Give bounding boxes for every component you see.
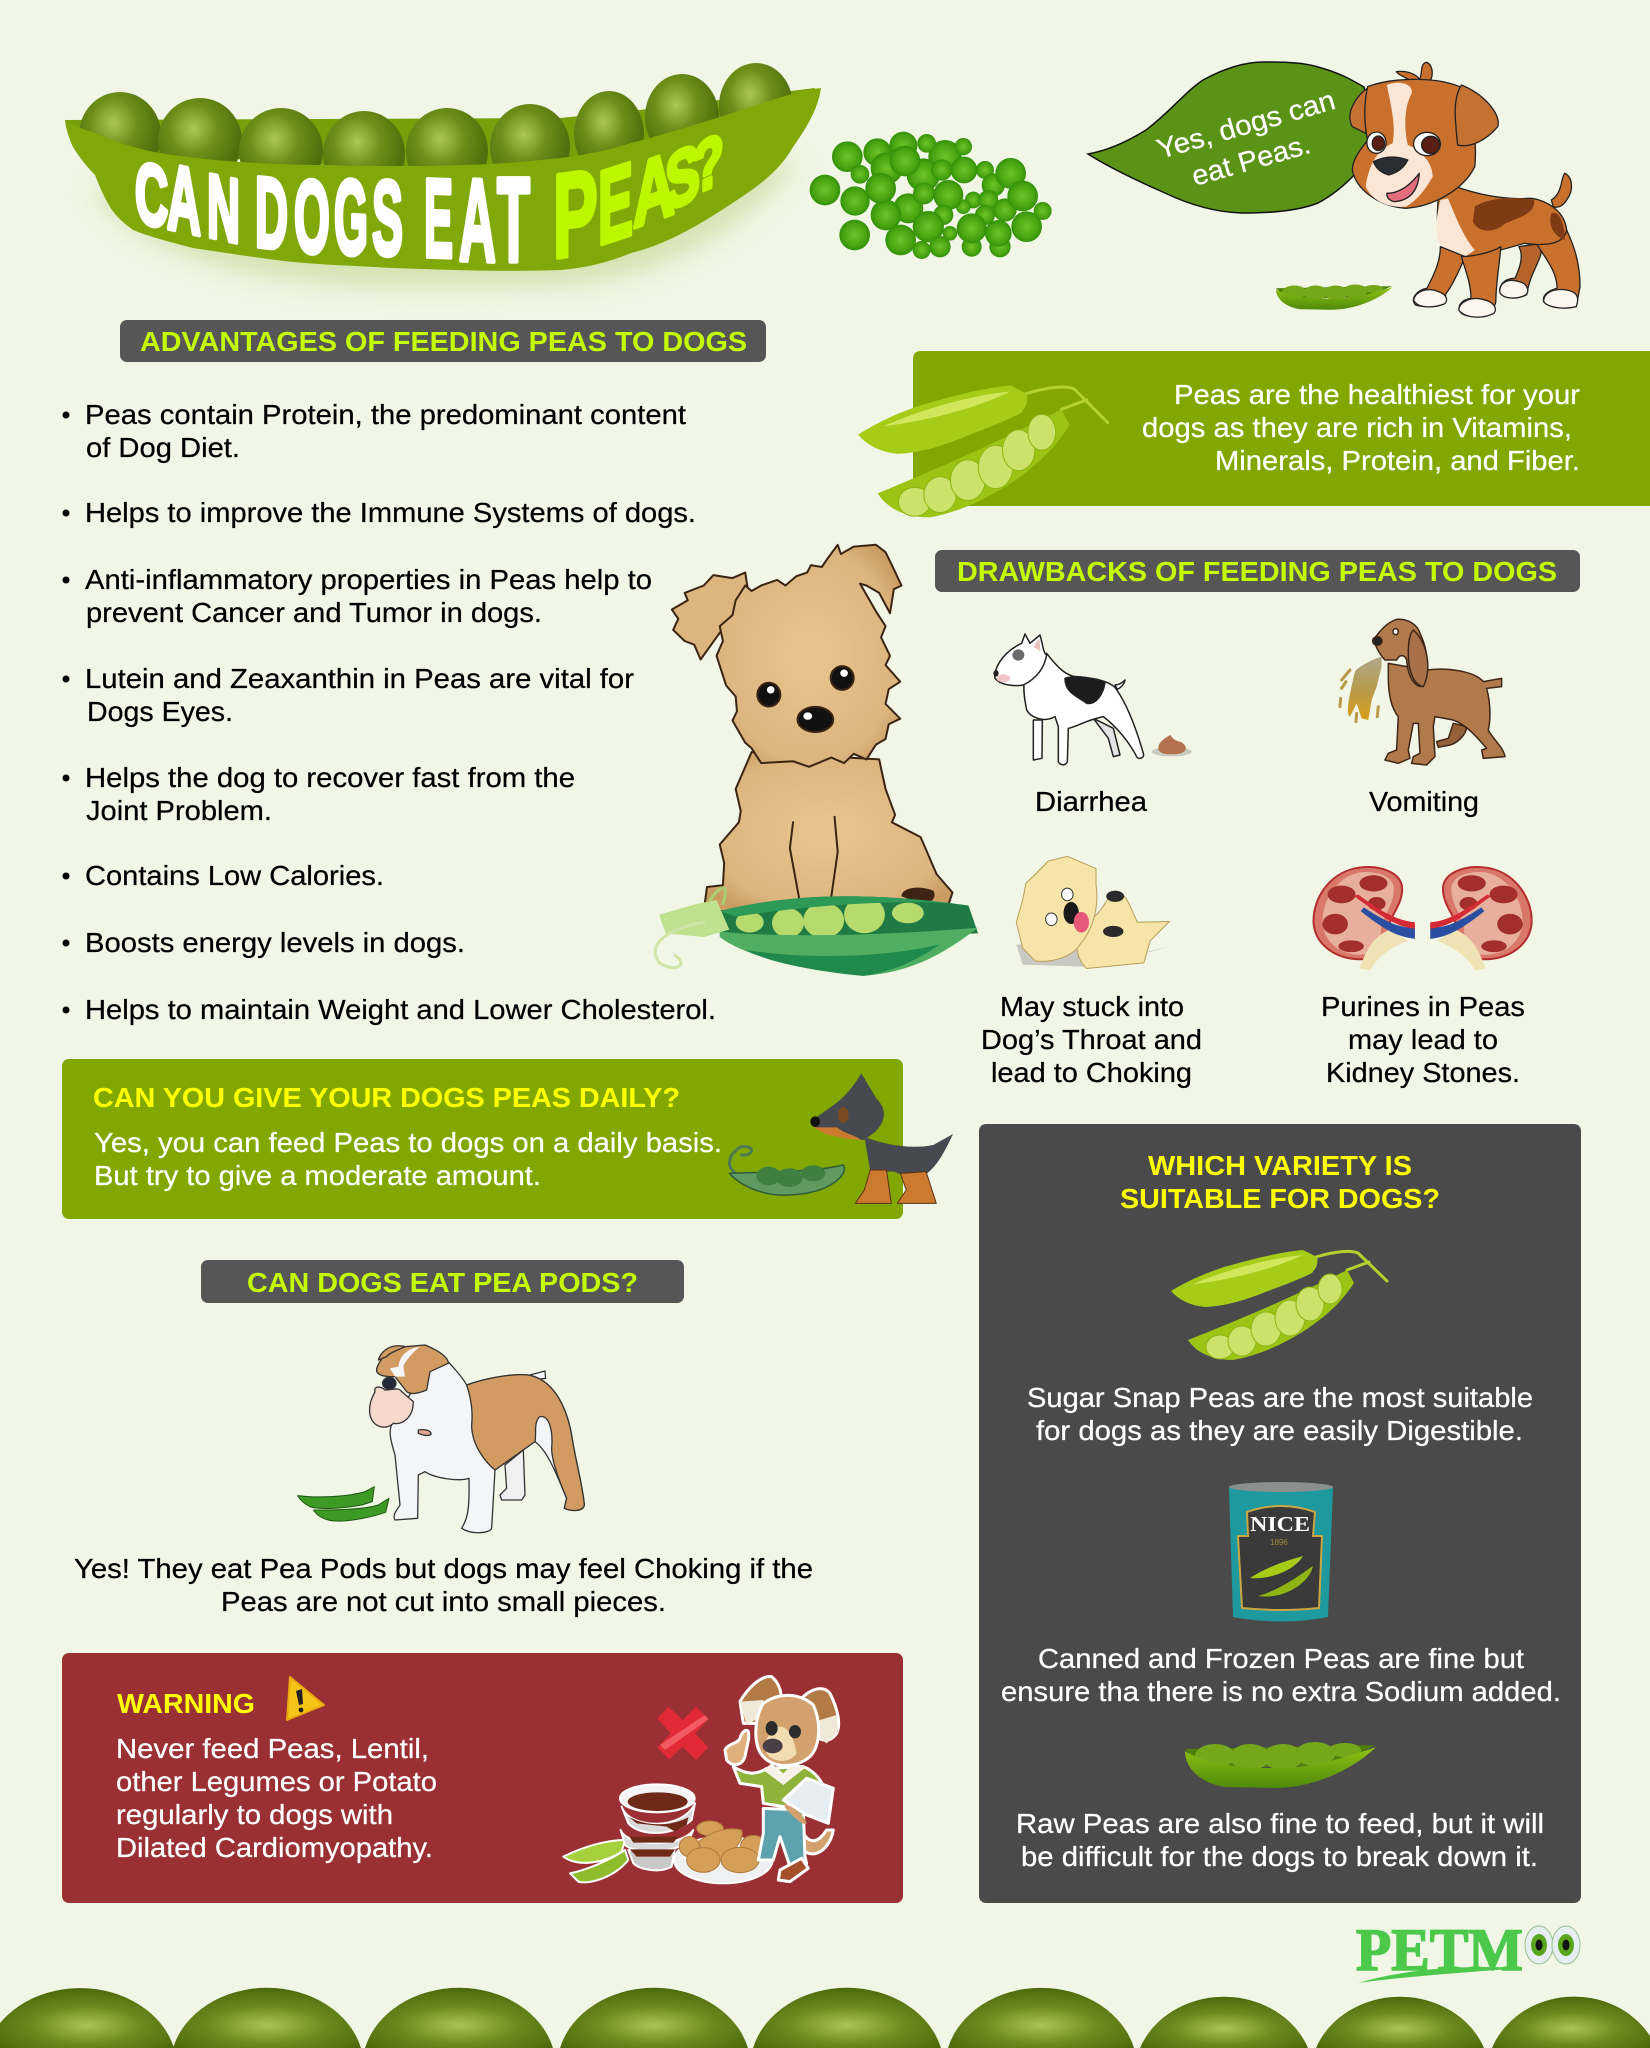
icon: can of peas: NICE xyxy=(1250,1512,1310,1536)
legs xyxy=(758,1808,807,1867)
poop pile xyxy=(1152,735,1192,756)
variety heading xyxy=(1120,1150,1440,1214)
fluffy sitting puppy on pod xyxy=(655,545,978,976)
panel: daily peas xyxy=(62,1059,903,1219)
title text: O xyxy=(294,158,330,275)
pea pods text xyxy=(74,1553,813,1617)
speech text: Yes, dogs can xyxy=(1153,84,1339,165)
advantages list: Helps to maintain Weight and Lower Cholesterol. xyxy=(85,994,716,1025)
panel: daily peas: But try to give a moderate amount. xyxy=(94,1160,541,1191)
arm and finger xyxy=(725,1730,749,1765)
advantages list: Helps the dog to recover fast from the xyxy=(85,762,575,793)
icon: kidneys xyxy=(1314,867,1532,970)
advantages list: Helps to improve the Immune Systems of dogs. xyxy=(85,497,696,528)
label: choking: Dog’s Throat and xyxy=(981,1024,1202,1055)
pea pod under puppy xyxy=(659,896,978,976)
pea pods text: Peas are not cut into small pieces. xyxy=(221,1586,666,1617)
advantages list: Boosts energy levels in dogs. xyxy=(85,927,465,958)
title text: D xyxy=(255,157,288,271)
petmoo logo: PETM xyxy=(1356,1917,1523,1983)
panel: warning: WARNING xyxy=(117,1688,255,1719)
panel: warning: Dilated Cardiomyopathy. xyxy=(116,1832,433,1863)
icon: can of peas: 1896 xyxy=(1270,1538,1288,1547)
label: diarrhea: Diarrhea xyxy=(1035,786,1147,817)
raw peas text: Raw Peas are also fine to feed, but it will xyxy=(1016,1808,1544,1839)
icon: snap peas on banner xyxy=(858,385,1108,517)
title text: P xyxy=(553,144,598,284)
green banner: Minerals, Protein, and Fiber. xyxy=(1215,445,1580,476)
icon: vomiting dog xyxy=(1340,619,1505,765)
green banner xyxy=(913,351,1650,506)
title text: E xyxy=(598,140,633,267)
speech text xyxy=(1153,84,1339,192)
title text: ? xyxy=(693,117,724,211)
green banner: Peas are the healthiest for your xyxy=(1174,379,1580,410)
icon: choking puppy xyxy=(1016,856,1169,968)
title text xyxy=(135,117,724,287)
label: choking xyxy=(981,991,1202,1088)
label: choking: May stuck into xyxy=(1000,991,1184,1022)
ears xyxy=(740,1677,782,1723)
small pea pod by puppy xyxy=(1276,284,1393,310)
sugar snap text: for dogs as they are easily Digestible. xyxy=(1036,1415,1523,1446)
title text: A xyxy=(459,155,496,287)
title pea pod banner xyxy=(65,63,821,288)
pile of green peas xyxy=(810,132,1052,259)
advantages list: prevent Cancer and Tumor in dogs. xyxy=(86,597,542,628)
advantages heading xyxy=(120,320,766,362)
icon: can of peas xyxy=(1229,1482,1333,1622)
icon: raw pea pod xyxy=(1185,1742,1376,1788)
canned peas text: ensure tha there is no extra Sodium added. xyxy=(1001,1676,1561,1707)
panel: warning: Never feed Peas, Lentil, xyxy=(116,1733,429,1764)
panel: warning xyxy=(62,1653,903,1903)
title text: G xyxy=(334,159,368,278)
title text: A xyxy=(167,144,201,255)
icon: sugar snap peas xyxy=(1171,1250,1387,1360)
illustration: dog with bowls and potatoes xyxy=(563,1677,839,1883)
icon: black and tan dog with pod xyxy=(729,1073,953,1203)
canned peas text: Canned and Frozen Peas are fine but xyxy=(1038,1643,1524,1674)
pods by bulldog xyxy=(298,1487,389,1521)
pea pods heading: CAN DOGS EAT PEA PODS? xyxy=(247,1267,638,1298)
snap peas xyxy=(563,1840,628,1882)
peas in the title pod xyxy=(79,63,793,197)
green banner: dogs as they are rich in Vitamins, xyxy=(1142,412,1572,443)
title text: T xyxy=(497,153,530,287)
icon: warning triangle xyxy=(287,1677,324,1720)
label: kidney stones: Purines in Peas xyxy=(1321,991,1525,1022)
label: kidney stones: may lead to xyxy=(1348,1024,1498,1055)
brown puppy xyxy=(1350,62,1580,317)
sugar snap text xyxy=(1027,1382,1533,1446)
title text: S xyxy=(372,159,403,278)
panel: daily peas: Yes, you can feed Peas to dogs on a daily basis. xyxy=(94,1127,722,1158)
panel: which variety xyxy=(979,1124,1581,1903)
drawbacks heading xyxy=(935,550,1580,592)
title text: S xyxy=(665,127,700,228)
head xyxy=(756,1695,819,1765)
panel: daily peas: CAN YOU GIVE YOUR DOGS PEAS DAILY? xyxy=(93,1082,680,1113)
panel: warning: other Legumes or Potato xyxy=(116,1766,437,1797)
raw peas text xyxy=(1016,1808,1544,1872)
pea pods text: Yes! They eat Pea Pods but dogs may feel Choking if the xyxy=(74,1553,813,1584)
advantages list: Peas contain Protein, the predominant content xyxy=(85,399,686,430)
advantages list: of Dog Diet. xyxy=(86,432,240,463)
label: kidney stones: Kidney Stones. xyxy=(1326,1057,1520,1088)
plate of potatoes xyxy=(674,1837,773,1883)
advantages list: Anti-inflammatory properties in Peas help to xyxy=(85,564,652,595)
bowls xyxy=(620,1784,695,1870)
raw peas text: be difficult for the dogs to break down it. xyxy=(1021,1841,1538,1872)
sugar snap text: Sugar Snap Peas are the most suitable xyxy=(1027,1382,1533,1413)
advantages list: Contains Low Calories. xyxy=(85,860,384,891)
title text: N xyxy=(207,156,240,263)
advantages list: Lutein and Zeaxanthin in Peas are vital for xyxy=(85,663,634,694)
advantages list: Dogs Eyes. xyxy=(87,696,233,727)
label: choking: lead to Choking xyxy=(991,1057,1192,1088)
title text: A xyxy=(633,132,675,248)
sweater xyxy=(733,1767,825,1807)
tail xyxy=(792,1817,833,1854)
canned peas text xyxy=(1001,1643,1561,1707)
label: vomiting: Vomiting xyxy=(1369,786,1479,817)
icon: warning x mark xyxy=(657,1707,708,1760)
label: kidney stones xyxy=(1321,991,1525,1088)
icon: diarrhea dog xyxy=(993,634,1192,765)
icon: bulldog with pods xyxy=(298,1345,584,1533)
speech leaf xyxy=(1088,62,1375,213)
advantages heading: ADVANTAGES OF FEEDING PEAS TO DOGS xyxy=(140,326,747,357)
speech text: eat Peas. xyxy=(1188,128,1314,192)
drawbacks heading: DRAWBACKS OF FEEDING PEAS TO DOGS xyxy=(957,556,1557,587)
title text: C xyxy=(135,143,168,247)
title text: E xyxy=(424,156,453,281)
bottom row of peas xyxy=(0,1988,1650,2048)
advantages list xyxy=(62,399,716,1025)
advantages list: Joint Problem. xyxy=(86,795,272,826)
variety heading: SUITABLE FOR DOGS? xyxy=(1120,1183,1440,1214)
panel: warning: regularly to dogs with xyxy=(116,1799,393,1830)
pea pods heading xyxy=(201,1260,684,1303)
variety heading: WHICH VARIETY IS xyxy=(1148,1150,1412,1181)
